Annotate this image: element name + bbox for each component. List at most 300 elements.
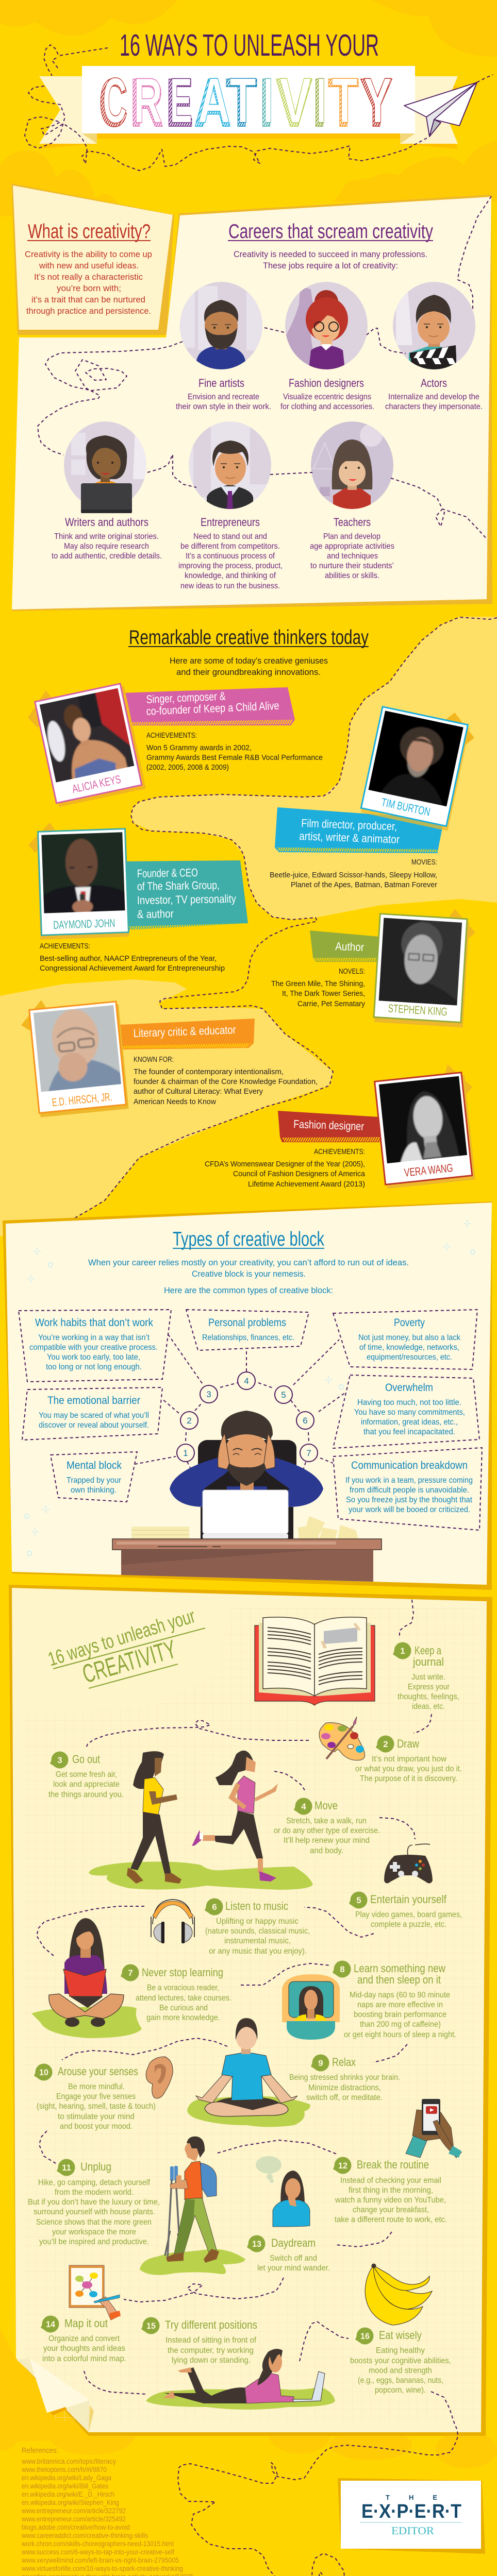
banner: Daymond John role: Investor, TV personality xyxy=(137,892,236,907)
circle numbers: 4 xyxy=(244,1376,249,1386)
polaroid: Daymond John xyxy=(37,828,131,940)
careers descriptions: Need to stand out and xyxy=(193,532,267,541)
panel: careers xyxy=(12,195,492,611)
block box: emotional barrier xyxy=(22,1387,162,1440)
polaroid: E.D. Hirsch xyxy=(28,1001,129,1117)
steps: descriptions: Play video games, board games, xyxy=(355,1910,462,1919)
careers descriptions: Think and write original stories. xyxy=(54,532,159,541)
careers labels: Entrepreneurs xyxy=(201,516,260,529)
careers descriptions: Plan and develop xyxy=(323,532,380,541)
block box: overwhelm: information, great ideas, etc., xyxy=(361,1418,458,1427)
text: careers intro xyxy=(234,249,427,270)
steps: badge numbers: 4 xyxy=(301,1802,306,1811)
steps: descriptions: Being stressed shrinks your brain. xyxy=(289,2073,400,2082)
banner: Daymond John role: of The Shark Group, xyxy=(137,878,220,893)
steps: descriptions: Engage your five senses xyxy=(56,2092,136,2101)
steps: descriptions: (sight, hearing, smell, taste & touch) xyxy=(37,2102,156,2111)
references: www.virtuesforlife.com/10-ways-to-spark-creative-thinking xyxy=(21,2565,183,2572)
banner: Alicia Keys role: Singer, composer & xyxy=(146,689,226,706)
portrait: actor xyxy=(393,282,475,369)
thinker: E.D. Hirsch Jr xyxy=(21,1000,318,1117)
panel: what is creativity xyxy=(11,183,174,335)
banner: Vera Wang role xyxy=(278,1111,380,1142)
block box: communication breakdown: from difficult people is unavoidable. xyxy=(350,1486,469,1495)
block box: communication breakdown xyxy=(333,1448,482,1530)
careers descriptions: characters they impersonate. xyxy=(385,402,483,411)
references: en.wikipedia.org/wiki/Stephen_King xyxy=(22,2499,119,2506)
portrait: writer xyxy=(64,421,146,513)
banner: Daymond John role xyxy=(126,860,248,930)
steps: descriptions: you’ll be inspired and productive. xyxy=(39,2238,149,2246)
steps: badge numbers: 7 xyxy=(128,1968,133,1978)
text: Daymond John achievements: Congressional Achievement Award for Entrepreneurship xyxy=(40,964,225,973)
careers descriptions: Internalize and develop the xyxy=(388,393,479,401)
panel: 16 ways xyxy=(9,1585,492,2436)
text: Vera Wang achievements: CFDA’s Womenswear Designer of the Year (2005), xyxy=(205,1160,365,1168)
banner: Daymond John role: Founder & CEO xyxy=(137,866,198,880)
block box: work habits xyxy=(19,1310,171,1382)
steps: descriptions: ideas, etc. xyxy=(412,1702,445,1711)
creativity lettering: Y xyxy=(363,65,392,137)
creativity lettering: A xyxy=(194,65,231,141)
block box: mental block: own thinking. xyxy=(71,1486,117,1495)
steps: badge numbers: 1 xyxy=(400,1646,405,1656)
text: E.D. Hirsch known for xyxy=(134,1055,318,1106)
illustration: phone in hand xyxy=(406,2099,461,2158)
block box: overwhelm: You have so many commitments, xyxy=(354,1408,465,1417)
references xyxy=(21,2446,338,2576)
circle numbers xyxy=(183,1376,311,1458)
portrait: fashion designer xyxy=(285,282,368,369)
circle numbers: 6 xyxy=(303,1416,308,1426)
page fold xyxy=(16,2358,94,2432)
references: www.entrepreneur.com/article/322792 xyxy=(21,2507,126,2515)
logo: the expert editor: EDITOR xyxy=(391,2524,434,2537)
dashed path: header xyxy=(25,45,493,171)
text: creativity definition xyxy=(25,249,152,316)
polaroid: Tim Burton: TIM BURTON xyxy=(380,795,432,819)
text: careers intro: These jobs require a lot of creativity: xyxy=(263,261,398,270)
text: E.D. Hirsch known for: KNOWN FOR: xyxy=(134,1055,174,1064)
references: www.careeraddict.com/creative-thinking-skills xyxy=(21,2532,148,2539)
steps: titles: Learn something new xyxy=(354,1962,446,1975)
careers labels: Actors xyxy=(421,377,447,389)
careers labels: Fashion designers xyxy=(289,377,364,389)
careers labels: Writers and authors xyxy=(65,516,148,529)
creativity lettering: V xyxy=(276,65,312,141)
references: www.britannica.com/topic/literacy xyxy=(21,2458,116,2465)
steps: descriptions: lying down or standing. xyxy=(172,2356,251,2365)
references: en.wikipedia.org/wiki/Lady_Gaga xyxy=(22,2474,111,2482)
icon: paper plane xyxy=(404,82,477,137)
banner: Stephen King role: Author xyxy=(335,940,365,954)
steps: titles: Keep a xyxy=(415,1644,441,1657)
polaroid: Tim Burton xyxy=(359,706,470,831)
block box: overwhelm xyxy=(333,1375,479,1448)
text: Vera Wang achievements xyxy=(205,1147,366,1189)
references: www.verywellmind.com/left-brain-vs-right-brain-2795005 xyxy=(21,2556,179,2564)
steps: descriptions: Mid-day naps (60 to 90 minute xyxy=(350,1991,450,1999)
creativity lettering: I xyxy=(263,65,273,137)
steps: badge numbers: 9 xyxy=(318,2058,323,2068)
steps: titles: Unplug xyxy=(80,2160,111,2173)
logo: the expert editor xyxy=(338,2478,485,2554)
numbered circles xyxy=(177,1372,318,1462)
steps: descriptions: and boost your mood. xyxy=(60,2122,132,2131)
logo: the expert editor: E·X·P·E·R·T xyxy=(361,2501,461,2522)
block box: emotional barrier: discover or reveal about yourself. xyxy=(39,1421,149,1430)
steps: titles: Draw xyxy=(397,1737,420,1750)
creativity lettering: C xyxy=(99,65,128,141)
steps: badge numbers xyxy=(39,1646,405,2341)
text: Tim Burton movies: Beetle-juice, Edward Scissor-hands, Sleepy Hollow, xyxy=(270,871,437,879)
text: Vera Wang achievements: Council of Fashion Designers of America xyxy=(233,1170,366,1178)
steps: badge numbers: 2 xyxy=(383,1739,388,1749)
text: Stephen King novels: The Green Mile, The Shining, xyxy=(271,979,365,988)
portrait: entrepreneur xyxy=(189,421,273,510)
steps: titles: Never stop learning xyxy=(142,1966,223,1979)
banner: Alicia Keys role xyxy=(122,687,295,725)
text: creativity definition: Creativity is the ability to come up xyxy=(25,249,152,259)
references: blogs.adobe.com/creative/how-to-avoid xyxy=(22,2523,130,2531)
text: Alicia Keys achievements: Won 5 Grammy awards in 2002, xyxy=(146,743,252,752)
steps: descriptions: Get some fresh air, xyxy=(56,1770,117,1779)
banner: Daymond John role: & author xyxy=(137,907,174,921)
portrait: teacher xyxy=(311,421,393,510)
creativity lettering: T xyxy=(226,65,257,141)
runner two xyxy=(192,1751,278,1882)
steps: descriptions: popcorn, wine). xyxy=(375,2386,426,2395)
text: Daymond John achievements: Best-selling author, NAACP Entrepreneurs of the Year, xyxy=(40,954,217,963)
steps: descriptions: switch off, or meditate. xyxy=(306,2093,383,2102)
steps: descriptions: Just write. xyxy=(411,1673,445,1682)
text: Alicia Keys achievements: Grammy Awards Best Female R&B Vocal Performance xyxy=(146,753,323,762)
creativity lettering: A xyxy=(197,65,230,137)
steps: titles: Daydream xyxy=(271,2236,316,2249)
steps: descriptions: gain more knowledge. xyxy=(146,2013,220,2022)
circle numbers: 3 xyxy=(206,1389,211,1399)
steps: badge numbers: 6 xyxy=(212,1902,217,1912)
creativity lettering: T xyxy=(328,65,359,141)
references: www.thetoptens.com/h/#i/9870 xyxy=(21,2466,107,2473)
steps: descriptions: It’ll help renew your mind xyxy=(284,1836,370,1845)
dashed connectors xyxy=(135,1334,345,1470)
steps: descriptions: attend lectures, take courses. xyxy=(136,1994,231,2003)
steps: descriptions: your thoughts and ideas xyxy=(43,2344,125,2353)
banner: E.D. Hirsch role xyxy=(120,1019,255,1049)
careers descriptions: be different from competitors. xyxy=(180,542,280,551)
block box: overwhelm: Overwhelm xyxy=(385,1382,433,1394)
careers labels: Fine artists xyxy=(198,377,244,389)
careers descriptions: Visualize eccentric designs xyxy=(283,393,371,401)
steps: descriptions: The purpose of it is discovery. xyxy=(360,1774,457,1783)
steps: badge numbers: 10 xyxy=(39,2067,48,2077)
steps: titles: Map it out xyxy=(64,2317,108,2330)
thinker: Daymond John xyxy=(28,822,248,973)
text: creativity definition: It’s not really a characteristic xyxy=(34,272,143,282)
steps: descriptions: let your mind wander. xyxy=(257,2264,330,2273)
block box: personal problems xyxy=(186,1310,309,1350)
text: creativity definition: it’s a trait that can be nurtured xyxy=(31,295,145,304)
steps: descriptions: Be curious and xyxy=(159,2004,208,2012)
creativity lettering: E xyxy=(166,65,193,141)
icon: game controller xyxy=(384,1844,433,1884)
steps: descriptions: Eating healthy xyxy=(376,2346,425,2355)
steps: descriptions: Express your xyxy=(408,1683,450,1691)
dashed path: thinkers xyxy=(71,617,497,1220)
text: Alicia Keys achievements xyxy=(146,731,323,772)
steps: descriptions: and body. xyxy=(310,1846,343,1855)
banner: Tim Burton role xyxy=(275,807,442,853)
circle numbers: 2 xyxy=(187,1416,192,1426)
steps: titles: Go out xyxy=(72,1753,101,1766)
text: thinkers intro: and their groundbreaking innovations. xyxy=(176,667,321,677)
steps: descriptions: change your breakfast, xyxy=(353,2206,429,2214)
steps: descriptions: from the modern world. xyxy=(55,2188,134,2197)
icon: mind map xyxy=(69,2265,121,2320)
steps: descriptions: Organize and convert xyxy=(48,2334,120,2343)
steps: descriptions: instrumental music, xyxy=(224,1937,291,1945)
steps: badge numbers: 11 xyxy=(62,2163,71,2173)
steps: descriptions: or what you draw, you just do it. xyxy=(355,1765,462,1773)
creativity lettering: E xyxy=(170,65,192,137)
steps: descriptions: Be more mindful. xyxy=(68,2082,125,2091)
steps: descriptions: look and appreciate xyxy=(53,1780,120,1789)
block box: work habits: compatible with your creative process. xyxy=(29,1343,158,1352)
creativity lettering: I xyxy=(312,65,326,141)
block box: work habits: You work too early, too late, xyxy=(47,1353,140,1362)
portrait: fine artist xyxy=(180,282,263,369)
heading: types of creative block: Types of creative block xyxy=(173,1228,324,1250)
runner one xyxy=(127,1751,181,1884)
polaroid: Vera Wang: VERA WANG xyxy=(404,1161,454,1179)
icon: headphones xyxy=(151,1900,194,1943)
steps: descriptions xyxy=(28,1673,462,2395)
steps: descriptions: watch a funny video on YouTube, xyxy=(335,2196,446,2205)
banner: Vera Wang role: Fashion designer xyxy=(293,1117,365,1133)
icon: open book xyxy=(255,1617,375,1705)
steps: badge numbers: 14 xyxy=(46,2319,56,2329)
steps: titles: Entertain yourself xyxy=(370,1893,447,1906)
steps: descriptions: or do any other type of exercise. xyxy=(274,1826,380,1835)
careers descriptions: to nurture their students’ xyxy=(310,562,394,570)
creativity lettering: R xyxy=(130,65,163,141)
thinker: Alicia Keys xyxy=(28,682,323,807)
references: en.wikipedia.org/wiki/E._D._Hirsch xyxy=(22,2490,114,2498)
icon: palette xyxy=(319,1717,365,1760)
block box: poverty: Not just money, but also a lack xyxy=(358,1333,460,1342)
text: Alicia Keys achievements: (2002, 2005, 2008 & 2009) xyxy=(146,763,229,772)
steps: descriptions: Minimize distractions, xyxy=(308,2083,381,2092)
heading: 16 ways to unleash your creativity xyxy=(45,1605,205,1689)
text: careers intro: Creativity is needed to succeed in many professions. xyxy=(234,249,427,259)
text: Alicia Keys achievements: ACHIEVEMENTS: xyxy=(146,731,197,740)
steps: badge numbers: 12 xyxy=(338,2161,347,2171)
dashed path: 16 ways route xyxy=(37,1600,458,2576)
references: www.entrepreneur.com/article/325492 xyxy=(21,2515,126,2523)
text: block intro: When your career relies mostly on your creativity, you can’t afford to run out of ideas. xyxy=(88,1258,409,1267)
creativity lettering: I xyxy=(316,65,326,137)
illustration: hiker xyxy=(140,2137,245,2275)
text: Vera Wang achievements: ACHIEVEMENTS: xyxy=(314,1147,365,1156)
light blobs behind thinkers xyxy=(0,617,497,1236)
block box: overwhelm: Having too much, not too little. xyxy=(357,1398,461,1407)
block box: work habits: Work habits that don’t work xyxy=(35,1317,153,1329)
careers descriptions: for clothing and accessories. xyxy=(280,402,374,411)
careers descriptions xyxy=(52,393,483,590)
block box: work habits: too long or not long enough. xyxy=(46,1363,142,1371)
text: block intro: Here are the common types of creative block: xyxy=(164,1285,333,1295)
creativity lettering: V xyxy=(279,65,311,137)
steps: badge numbers: 5 xyxy=(356,1895,361,1905)
text: Stephen King novels: It, The Dark Tower Series, xyxy=(282,989,365,998)
steps: descriptions: Instead of checking your email xyxy=(340,2176,441,2185)
text: Stephen King novels: Carrie, Pet Sematary xyxy=(297,999,365,1008)
block box: communication breakdown: So you freeze just by the thought that xyxy=(346,1496,473,1504)
steps: descriptions: thoughts, feelings, xyxy=(397,1692,459,1701)
steps: descriptions: than 200 mg of caffeine) xyxy=(360,2020,441,2029)
steps: titles: journal xyxy=(412,1655,444,1668)
creativity lettering: T xyxy=(229,65,256,137)
text: E.D. Hirsch known for: founder & chairman of the Core Knowledge Foundation, xyxy=(134,1077,318,1086)
text: Tim Burton movies xyxy=(270,858,437,889)
steps: descriptions: into a colorful mind map. xyxy=(42,2354,126,2363)
text: Daymond John achievements xyxy=(40,942,225,973)
steps: titles xyxy=(58,1644,447,2342)
steps: descriptions: the things around you. xyxy=(48,1790,124,1799)
steps: descriptions: mood and strength xyxy=(369,2366,432,2375)
references: References: xyxy=(22,2446,58,2455)
steps: descriptions: But if you don’t have the luxury or time, xyxy=(28,2198,160,2207)
banner: Tim Burton role: artist, writer & animator xyxy=(299,829,400,846)
polaroid: Alicia Keys xyxy=(34,682,146,807)
block box: mental block xyxy=(51,1452,137,1502)
circle numbers: 1 xyxy=(183,1448,188,1458)
careers descriptions: to add authentic, credible details. xyxy=(52,552,162,561)
text: Vera Wang achievements: Lifetime Achievement Award (2013) xyxy=(248,1180,365,1189)
creativity lettering xyxy=(99,65,393,141)
block box: work habits: You’re working in a way that isn’t xyxy=(38,1333,150,1342)
illustration: stressed man at desk xyxy=(112,1411,382,1582)
polaroid: Stephen King: STEPHEN KING xyxy=(388,1002,448,1018)
banner: Alicia Keys role: co-founder of Keep a Child Alive xyxy=(146,699,279,718)
steps: titles: Move xyxy=(314,1799,338,1812)
polaroid: Daymond John: DAYMOND JOHN xyxy=(53,917,115,931)
polaroid: Stephen King xyxy=(373,913,470,1027)
heading: careers: Careers that scream creativity xyxy=(228,221,433,243)
steps: descriptions: surround yourself with house plants. xyxy=(34,2208,155,2216)
steps: descriptions: Stretch, take a walk, run xyxy=(286,1817,367,1825)
block box: personal problems: Personal problems xyxy=(208,1317,286,1329)
creativity lettering: T xyxy=(332,65,358,137)
thinker: Tim Burton xyxy=(270,706,474,889)
steps: titles: Arouse your senses xyxy=(58,2065,138,2078)
text: thinkers intro: Here are some of today’s creative geniuses xyxy=(170,656,328,666)
steps: descriptions: naps are more effective in xyxy=(357,2001,443,2009)
thinker: Stephen King xyxy=(271,909,475,1027)
steps: badge numbers: 3 xyxy=(57,1755,62,1765)
circle numbers: 7 xyxy=(306,1448,311,1458)
banner: E.D. Hirsch role: Literary critic & educator xyxy=(133,1023,236,1040)
text: E.D. Hirsch known for: American Needs to Know xyxy=(134,1097,216,1106)
heading: 16 ways to unleash your creativity: 16 ways to unleash your xyxy=(45,1605,198,1671)
careers descriptions: Envision and recreate xyxy=(188,393,259,401)
heading: 16 ways to unleash your creativity: CREATIVITY xyxy=(79,1634,179,1689)
illustration: reading woman xyxy=(31,1918,142,2038)
illustration: meditating man xyxy=(187,2018,310,2127)
text: creativity definition: with new and useful ideas. xyxy=(39,261,139,270)
text: Tim Burton movies: MOVIES: xyxy=(411,858,437,867)
circle numbers: 5 xyxy=(281,1390,286,1400)
steps: descriptions: first thing in the morning, xyxy=(349,2186,433,2195)
text: thinkers intro xyxy=(170,656,328,677)
thinker: Vera Wang xyxy=(205,1064,475,1189)
creativity lettering: Y xyxy=(360,65,393,141)
steps: descriptions: the computer, try working xyxy=(168,2346,254,2355)
steps: descriptions: to stimulate your mind xyxy=(58,2112,135,2121)
polaroid: Alicia Keys: ALICIA KEYS xyxy=(71,773,122,795)
heading: remarkable thinkers: Remarkable creative thinkers today xyxy=(129,626,369,649)
steps: titles: and then sleep on it xyxy=(357,1973,441,1986)
illustration: runners on grass xyxy=(89,1751,313,1890)
text: Stephen King novels xyxy=(271,967,365,1008)
careers labels xyxy=(65,377,447,529)
steps: badge numbers: 15 xyxy=(146,2321,156,2331)
banner: Stephen King role xyxy=(310,930,379,962)
steps: badges xyxy=(34,1642,411,2344)
steps: descriptions: Instead of sitting in front of xyxy=(165,2336,257,2345)
steps: titles: Eat wisely xyxy=(379,2329,422,2342)
steps: descriptions: complete a puzzle, etc. xyxy=(371,1920,446,1929)
steps: descriptions: Switch off and xyxy=(270,2254,317,2263)
block box: emotional barrier: The emotional barrier xyxy=(47,1395,140,1406)
block box: communication breakdown: your work will be booed or criticized. xyxy=(349,1505,470,1514)
block box: communication breakdown: Communication breakdown xyxy=(351,1460,468,1471)
careers descriptions: It’s a continuous process of xyxy=(186,552,275,561)
steps: titles: Break the routine xyxy=(357,2158,429,2171)
references: www.success.com/6-ways-to-tap-into-your-creative-self xyxy=(21,2548,174,2556)
careers descriptions: new ideas to run the business. xyxy=(180,582,280,590)
text: creativity definition: through practice and persistence. xyxy=(26,306,151,316)
steps: descriptions: It’s not important how xyxy=(372,1755,447,1764)
steps: badge numbers: 8 xyxy=(340,1964,345,1974)
text: E.D. Hirsch known for: author of Cultural Literacy: What Every xyxy=(134,1087,263,1096)
illustration: woman lying with laptop xyxy=(146,2349,335,2410)
references: en.wikipedia.org/wiki/Bill_Gates xyxy=(22,2482,108,2490)
icon: bananas xyxy=(365,2264,432,2325)
steps: descriptions: or any music that you enjoy). xyxy=(209,1947,307,1956)
steps: descriptions: boosts your cognitive abilities, xyxy=(350,2357,451,2365)
text: Stephen King novels: NOVELS: xyxy=(339,967,365,976)
steps: badge numbers: 16 xyxy=(360,2331,370,2341)
illustration: sleeping woman xyxy=(282,1974,340,2040)
icon: ear xyxy=(146,2057,173,2098)
steps: descriptions: take a different route to work, etc. xyxy=(335,2215,447,2224)
dashed path: careers xyxy=(38,196,491,539)
steps: descriptions: (nature sounds, classical music, xyxy=(205,1927,310,1936)
block box: poverty: Poverty xyxy=(394,1317,425,1329)
careers descriptions: knowledge, and thinking of xyxy=(185,571,276,580)
steps: descriptions: Be a voracious reader, xyxy=(147,1984,219,1992)
block box: poverty: of time, knowledge, networks, xyxy=(359,1343,459,1352)
creativity lettering: I xyxy=(259,65,273,141)
block box: mental block: Mental block xyxy=(67,1460,122,1471)
text: Tim Burton movies: Planet of the Apes, Batman, Batman Forever xyxy=(291,880,437,889)
banner: Tim Burton role: Film director, producer, xyxy=(301,817,397,833)
text: block intro xyxy=(88,1258,409,1295)
text: Daymond John achievements: ACHIEVEMENTS: xyxy=(40,942,90,951)
polaroid: Vera Wang xyxy=(374,1072,475,1189)
